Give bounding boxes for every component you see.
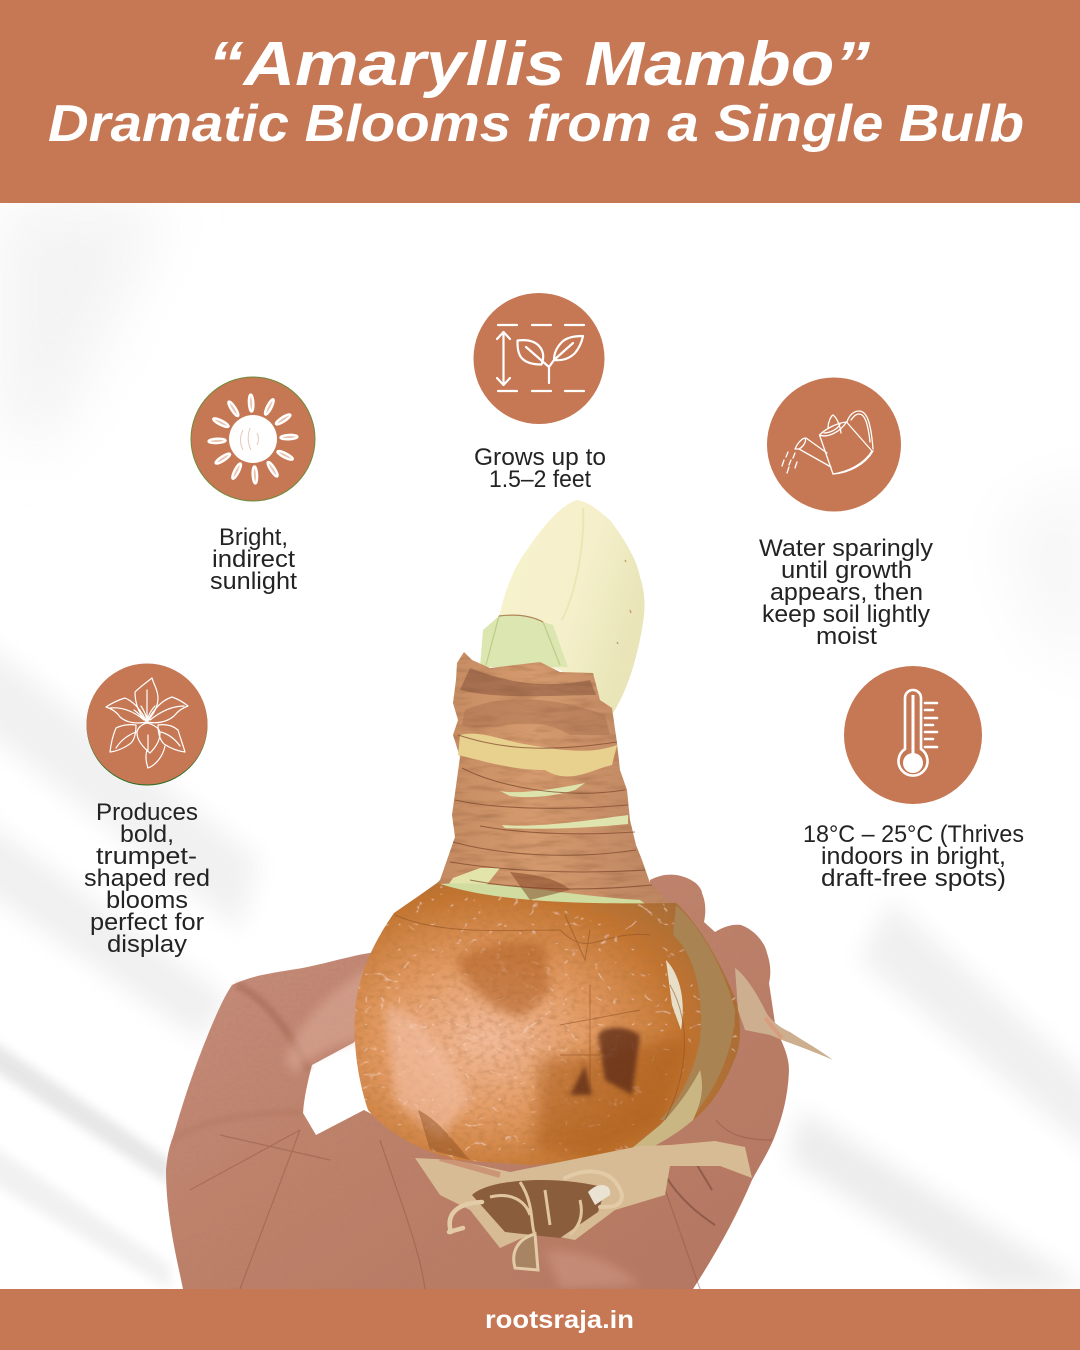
website: rootsraja.in — [485, 1306, 634, 1334]
footer band — [0, 1289, 1080, 1350]
label: watering: appears, then — [770, 579, 923, 606]
label: blooms: bold, — [120, 821, 174, 848]
bulb body — [355, 883, 740, 1165]
label: temperature: draft-free spots) — [821, 865, 1006, 892]
bulb neck — [395, 652, 680, 950]
icon: watering can — [767, 378, 901, 512]
label: blooms: blooms — [106, 887, 188, 914]
label: watering: until growth — [781, 557, 912, 584]
dry roots at bulb base — [415, 1141, 752, 1270]
label: watering: Water sparingly — [759, 535, 933, 562]
label: temperature: 18°C – 25°C (Thrives — [803, 821, 1024, 848]
icon: sun — [191, 377, 315, 501]
bud — [482, 500, 645, 713]
label: blooms — [84, 799, 210, 958]
header band — [0, 0, 1080, 203]
label: height — [474, 444, 606, 493]
icon: thermometer — [844, 666, 982, 804]
label: sunlight: indirect — [212, 546, 295, 573]
label: blooms: trumpet- — [96, 843, 197, 870]
icon: plant height — [474, 293, 604, 424]
label: watering: moist — [816, 623, 877, 650]
label: sunlight — [210, 524, 297, 595]
label: sunlight: Bright, — [219, 524, 288, 551]
label: blooms: Produces — [96, 799, 198, 826]
label: sunlight: sunlight — [210, 568, 297, 595]
label: temperature: indoors in bright, — [821, 843, 1006, 870]
label: height: 1.5–2 feet — [489, 466, 591, 493]
dry husk tail — [735, 968, 833, 1060]
feature: temperature — [803, 666, 1024, 892]
label: height: Grows up to — [474, 444, 606, 471]
title: “Amaryllis Mambo” — [208, 30, 870, 99]
feature: watering — [759, 378, 933, 650]
feature: sunlight — [191, 377, 315, 595]
green leaf tip — [480, 615, 568, 667]
icon: lily flower — [86, 664, 208, 786]
hand — [166, 875, 789, 1289]
label: temperature — [803, 821, 1024, 892]
subtitle: Dramatic Blooms from a Single Bulb — [48, 95, 1024, 153]
photo: hand holding amaryllis bulb — [166, 500, 833, 1289]
label: watering: keep soil lightly — [762, 601, 930, 628]
feature: height — [474, 293, 606, 493]
label: blooms: shaped red — [84, 865, 210, 892]
label: blooms: perfect for — [90, 909, 204, 936]
label: blooms: display — [107, 931, 187, 958]
feature: blooms — [84, 664, 210, 958]
label: watering — [759, 535, 933, 650]
